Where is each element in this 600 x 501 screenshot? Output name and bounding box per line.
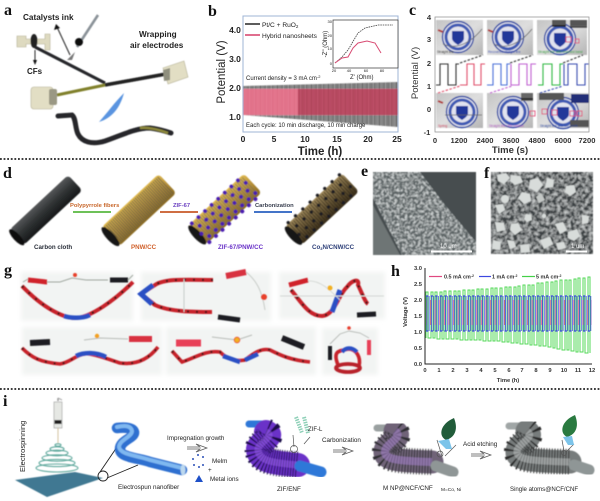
axes ticks: 7200 bbox=[579, 136, 595, 145]
axes ticks: 8 bbox=[534, 368, 538, 374]
photo row with stamps: Straight line with reversed bend bbox=[538, 50, 583, 54]
icon: leaf zoom single atoms bbox=[562, 415, 577, 456]
panel i: single atom catalyst synthesis bbox=[3, 393, 589, 497]
icon: M NP spiky fiber bbox=[377, 428, 453, 472]
photo 3 bbox=[280, 280, 384, 316]
icon: electrospinning syringe and spiral bbox=[15, 398, 103, 497]
axes ticks: 3 bbox=[465, 368, 469, 374]
arrow: impregnation bbox=[187, 444, 207, 452]
label a: a bbox=[4, 2, 12, 19]
axes ticks: 3.0 bbox=[229, 54, 241, 64]
square wave traces bbox=[436, 55, 589, 93]
icon: single atoms spiky fiber bbox=[509, 426, 589, 470]
axes ticks: 10 bbox=[561, 368, 567, 374]
dotted divider 2 bbox=[0, 388, 600, 390]
axes ticks: 2 bbox=[451, 368, 455, 374]
axes ticks: 11 bbox=[575, 368, 582, 374]
icon: Melm ring bbox=[192, 454, 204, 468]
SEM micrograph bbox=[373, 172, 476, 255]
legend: 5 mA cm bbox=[536, 274, 558, 280]
inset impedance chart: 10 bbox=[328, 46, 333, 51]
blue curve 1 mA bbox=[426, 296, 592, 331]
photo row with stamps: Straight line with two knots bbox=[540, 124, 578, 128]
step: ZIF-67 bbox=[160, 203, 198, 212]
legend: Pt/C + RuO bbox=[262, 22, 296, 29]
legend bbox=[429, 274, 561, 280]
axes ticks: 3600 bbox=[503, 136, 519, 145]
axes ticks: 3.0 bbox=[414, 266, 422, 272]
photo 6 bbox=[330, 326, 369, 372]
axes ticks: 1200 bbox=[451, 136, 467, 145]
dotted divider 1 bbox=[0, 158, 600, 160]
icon: metal ion bbox=[195, 475, 203, 482]
axes ticks: 0 bbox=[423, 368, 427, 374]
label c: c bbox=[409, 2, 416, 19]
labels of cylinders: 3 bbox=[320, 246, 323, 251]
y axis title: Potential (V) bbox=[410, 47, 421, 99]
legend bbox=[245, 22, 318, 40]
text: M NP@NCF/CNF: M NP@NCF/CNF bbox=[383, 485, 433, 492]
inset impedance chart: Z' (Ohm) bbox=[350, 75, 373, 81]
legend: 0.5 mA cm bbox=[444, 274, 471, 280]
axes ticks: 0.0 bbox=[414, 362, 422, 368]
labels of cylinders: ZIF-67/PNW/CC bbox=[218, 244, 264, 251]
scale bar e: 10 um bbox=[440, 244, 457, 250]
axes ticks: 7 bbox=[520, 368, 524, 374]
step: carbonization bbox=[254, 203, 294, 212]
text: M=Co, Ni: M=Co, Ni bbox=[441, 487, 461, 493]
current density note: Current density = 3 mA cm bbox=[246, 76, 317, 82]
text: carbonization: Carbonization bbox=[322, 437, 361, 444]
axes ticks: 2.5 bbox=[414, 282, 423, 288]
axes ticks: 3 bbox=[427, 35, 431, 44]
label i: i bbox=[3, 393, 8, 410]
panel e: SEM image bbox=[361, 163, 476, 255]
photo 1 bbox=[22, 273, 133, 318]
text: wrapping air electrodes: air electrodes bbox=[130, 41, 184, 50]
axes ticks bbox=[414, 266, 595, 374]
photo 5 bbox=[172, 335, 310, 362]
axes ticks: 1.0 bbox=[229, 112, 241, 122]
cylinder: ZIF-67/PNW/CC bbox=[185, 174, 262, 248]
step: polypyrrole fibers bbox=[70, 203, 119, 212]
photo row with stamps: Straight line bbox=[437, 50, 454, 54]
text: catalysts ink: Catalysts ink bbox=[23, 13, 74, 22]
axes ticks: 10 bbox=[300, 134, 310, 144]
photo row with stamps: Recovered straight line bbox=[488, 50, 521, 54]
text: Melm: Melm bbox=[212, 458, 227, 465]
axes ticks: 2.0 bbox=[229, 83, 241, 93]
cylinder: PNW/CC bbox=[99, 174, 176, 249]
axes ticks: 4800 bbox=[529, 136, 545, 145]
legend: Hybrid nanosheets bbox=[262, 33, 318, 40]
axes ticks: 20 bbox=[363, 134, 373, 144]
x axis title: Time (s) bbox=[492, 145, 528, 156]
cylinder: carbon cloth bbox=[7, 175, 82, 247]
icon: leaf zoom M NP bbox=[437, 418, 456, 457]
cycling band bbox=[243, 82, 398, 127]
icon: ZIF-L crystal bbox=[290, 417, 310, 452]
text: impregnation growth: Impregnation growth bbox=[167, 435, 225, 442]
x axis title: Time (h) bbox=[497, 378, 519, 384]
plot frame bbox=[425, 268, 592, 364]
axes ticks: 1.0 bbox=[414, 330, 422, 336]
axes ticks: 1 bbox=[427, 82, 432, 91]
panel b: potential vs time chart bbox=[208, 3, 402, 158]
axes ticks: 9 bbox=[548, 368, 552, 374]
axes ticks: 4 bbox=[479, 368, 483, 374]
current density note: -2 bbox=[317, 74, 321, 79]
cycle note: Each cycle: 10 min discharge, 10 min charge bbox=[246, 123, 366, 129]
inset impedance chart: 80 bbox=[380, 68, 385, 73]
text: electrospinning: Electrospinning bbox=[18, 421, 27, 472]
icon: magnifier lines and circle bbox=[98, 447, 138, 481]
panel h: voltage vs time chart bbox=[391, 263, 595, 384]
inset impedance chart: 30 bbox=[328, 19, 333, 24]
legend: 1 mA cm bbox=[492, 274, 514, 280]
axes ticks bbox=[229, 25, 402, 144]
inset impedance chart: 0 bbox=[330, 61, 333, 66]
axes ticks: 15 bbox=[332, 134, 342, 144]
y axis title: Voltage (V) bbox=[403, 297, 409, 327]
inset impedance chart: 20 bbox=[332, 68, 337, 73]
panel g: flexible battery photos bbox=[4, 262, 385, 375]
labels of cylinders bbox=[34, 244, 355, 251]
text: acid etching: Acid etching bbox=[463, 441, 498, 448]
axes ticks: 5 bbox=[493, 368, 497, 374]
labels of cylinders: PNW/CC bbox=[131, 244, 157, 251]
label h: h bbox=[391, 263, 400, 280]
legend: -2 bbox=[558, 274, 561, 278]
label d: d bbox=[3, 165, 12, 182]
photo row with stamps: Straight line with rotation bbox=[489, 124, 524, 128]
axes ticks: 1 bbox=[437, 368, 441, 374]
legend: 2 bbox=[296, 24, 299, 29]
x axis title: Time (h) bbox=[298, 146, 342, 158]
panel f: SEM image bbox=[484, 165, 593, 254]
photo 2 bbox=[141, 272, 267, 320]
text: single atoms: Single atoms@NCF/CNF bbox=[510, 486, 578, 493]
axes ticks: 0 bbox=[427, 105, 431, 114]
panel d: fabrication of Co3N/CNW/CC bbox=[3, 165, 359, 251]
inset impedance chart: 60 bbox=[364, 68, 369, 73]
panel c: flexibility test chart bbox=[409, 2, 595, 156]
text: plus: + bbox=[208, 467, 212, 474]
inset impedance chart: 20 bbox=[328, 33, 333, 38]
axes ticks: 2.0 bbox=[414, 298, 422, 304]
icon: ZIF/ENF spiky fiber bbox=[249, 424, 321, 472]
plot frame bbox=[243, 16, 398, 132]
inset impedance chart: 40 bbox=[347, 68, 352, 73]
axes ticks: 5 bbox=[272, 134, 277, 144]
green curve 5 mA bbox=[426, 277, 590, 353]
step: carbonization: Carbonization bbox=[255, 203, 294, 209]
axes ticks: 4.0 bbox=[229, 25, 241, 35]
axes ticks: 6 bbox=[507, 368, 511, 374]
axes ticks: 0 bbox=[433, 136, 437, 145]
text: ZIF/ENF: ZIF/ENF bbox=[277, 486, 301, 493]
text: CFs: CFs bbox=[27, 67, 43, 76]
text: electrospun nanofiber: Electrospun nanofiber bbox=[118, 484, 179, 491]
axes ticks: 4 bbox=[427, 13, 432, 22]
inset impedance chart bbox=[323, 19, 398, 81]
inset impedance chart: -Z'' (Ohm) bbox=[323, 31, 329, 57]
pink curve 0.5 mA bbox=[426, 300, 592, 325]
label g: g bbox=[4, 262, 12, 279]
axes ticks: 6000 bbox=[555, 136, 571, 145]
labels of cylinders: Carbon cloth bbox=[34, 244, 72, 251]
labels of cylinders: N/CNW/CC bbox=[322, 244, 355, 251]
text: ZIF-L: ZIF-L bbox=[308, 427, 323, 433]
drawing: winding rig bbox=[17, 15, 188, 143]
panel a: wrapping air electrodes diagram bbox=[4, 2, 188, 143]
photo backgrounds bbox=[21, 272, 385, 375]
legend: -2 bbox=[471, 274, 474, 278]
y axis title: Potential (V) bbox=[216, 40, 228, 104]
labels of cylinders: Co bbox=[312, 244, 320, 251]
axes ticks: 0.5 bbox=[414, 346, 423, 352]
plot frame bbox=[435, 17, 589, 132]
arrow: carbonization bbox=[333, 447, 353, 455]
step: polypyrrole fibers: Polypyrrole fibers bbox=[70, 203, 119, 209]
axes ticks: 1.5 bbox=[414, 314, 423, 320]
text: wrapping air electrodes: Wrapping bbox=[139, 30, 177, 39]
scale bar f: 1 um bbox=[571, 244, 584, 250]
label e: e bbox=[361, 163, 368, 180]
axes ticks: 0 bbox=[241, 134, 246, 144]
photo 4 bbox=[22, 334, 158, 364]
photo row with stamps: Spring bbox=[438, 124, 447, 128]
axes ticks bbox=[424, 13, 595, 145]
legend: -2 bbox=[514, 274, 517, 278]
label f: f bbox=[484, 165, 490, 182]
axes ticks: 25 bbox=[392, 134, 402, 144]
axes ticks: 2400 bbox=[477, 136, 493, 145]
SEM micrograph bbox=[491, 172, 593, 254]
arrow: acid etching bbox=[471, 451, 491, 459]
icon: electrospun nanofiber tube bbox=[117, 426, 186, 476]
axes ticks: -1 bbox=[424, 128, 431, 137]
photo row with stamps bbox=[436, 20, 589, 128]
step: ZIF-67: ZIF-67 bbox=[173, 203, 190, 209]
label b: b bbox=[208, 3, 217, 20]
cylinder: Co3N/CNW/CC bbox=[282, 173, 359, 247]
axes ticks: 2 bbox=[427, 59, 431, 68]
text: metal ions: Metal ions bbox=[210, 476, 239, 483]
axes ticks: 12 bbox=[589, 368, 595, 374]
